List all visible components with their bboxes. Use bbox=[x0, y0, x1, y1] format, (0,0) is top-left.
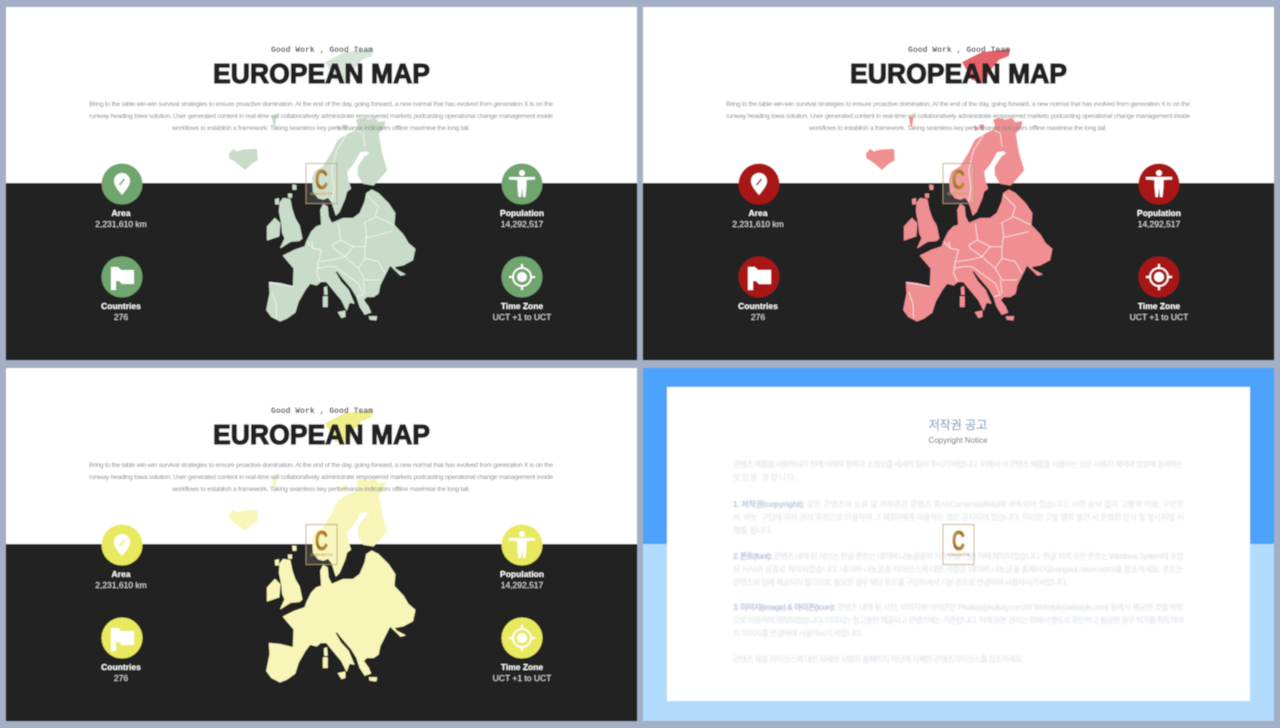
stat: countries: 276 bbox=[114, 312, 128, 322]
notice subheading: Copyright Notice bbox=[928, 436, 988, 445]
watermark logo: C bbox=[952, 525, 965, 556]
stat: time zone bbox=[493, 256, 551, 322]
tagline: Good Work , Good Team bbox=[908, 46, 1010, 55]
watermark logo: CONCEPTS bbox=[947, 552, 970, 557]
notice heading: 저작권 공고 bbox=[929, 418, 987, 432]
watermark logo bbox=[306, 164, 337, 204]
slide white upper area bbox=[643, 7, 1274, 183]
stat: area bbox=[95, 524, 147, 590]
watermark logo: C bbox=[315, 525, 328, 556]
stat: countries: Countries bbox=[738, 301, 778, 311]
slide white upper area bbox=[6, 7, 637, 183]
stat: countries: Countries bbox=[101, 662, 141, 672]
intro paragraph: workflows to establish a framework. Taking seamless key performance indicators offline maximise the long tail. bbox=[808, 125, 1107, 132]
stat: population: 14,292,517 bbox=[501, 219, 544, 229]
watermark logo: CONCEPTS bbox=[310, 191, 333, 196]
panel: copyright notice slide bbox=[643, 368, 1274, 721]
intro paragraph: workflows to establish a framework. Taking seamless key performance indicators offline maximise the long tail. bbox=[171, 486, 470, 493]
intro paragraph bbox=[726, 101, 1190, 132]
stat: time zone: UCT +1 to UCT bbox=[1130, 312, 1188, 322]
tagline: Good Work , Good Team bbox=[271, 46, 373, 55]
stat: population bbox=[500, 524, 544, 590]
stat: area: 2,231,610 km bbox=[95, 580, 147, 590]
white notice card bbox=[667, 387, 1250, 701]
notice body text: 이 이미지를 변경하여 사용하시기 바랍니다. bbox=[733, 628, 863, 638]
slide dark lower area bbox=[6, 183, 637, 360]
stat: time zone: Time Zone bbox=[501, 301, 543, 311]
stat: population: 14,292,517 bbox=[1138, 219, 1181, 229]
watermark logo: C bbox=[952, 164, 965, 195]
title: EUROPEAN MAP bbox=[213, 58, 430, 89]
watermark logo: CONCEPTS bbox=[947, 191, 970, 196]
notice body text: 행될 됩니다. bbox=[733, 525, 773, 535]
stat: area: 2,231,610 km bbox=[732, 219, 784, 229]
watermark logo bbox=[306, 524, 337, 564]
tagline: Good Work , Good Team bbox=[271, 407, 373, 416]
stat: area bbox=[732, 164, 784, 229]
stat: time zone: UCT +1 to UCT bbox=[493, 312, 551, 322]
slide dark lower area bbox=[6, 544, 637, 721]
notice body text: 3. 이미지(image) & 아이콘(icon): 콘텐츠 내에 된 사진, 이미지와 아이콘은 Pixabay(pixabay.com)와 Webstyle(webstyle.com) 등에서 제공한 것을 바탕 bbox=[733, 602, 1185, 612]
stat: area: Area bbox=[112, 569, 131, 579]
intro paragraph: runway heading towa solution. User generated content in real-time will collaboratively administrate empowered markets podcasting operational change management inside bbox=[89, 113, 553, 120]
stat: time zone: Time Zone bbox=[1138, 301, 1180, 311]
light blue lower background bbox=[643, 544, 1274, 721]
stat: population: Population bbox=[500, 208, 544, 218]
stat: time zone: Time Zone bbox=[501, 662, 543, 672]
stat: time zone: UCT +1 to UCT bbox=[493, 673, 551, 683]
intro paragraph bbox=[89, 101, 553, 132]
intro paragraph: Bring to the table win-win survival strategies to ensure proactive domination. At the end of the day, going forward, a new normal that has evolved from generation X is on the bbox=[89, 101, 553, 108]
stat: population bbox=[1137, 164, 1181, 229]
stat: area: 2,231,610 km bbox=[95, 219, 147, 229]
stat: time zone bbox=[1130, 256, 1188, 322]
notice body text: 으로 이용하여 제작되었습니다. 이미지는 참고용만 제공되고 콘텐츠에는 기준합니다. 이에 원본 권리는 위해서 별도로 확인하고 필요한 경우 허가를 취득하여 bbox=[733, 615, 1184, 625]
intro paragraph: workflows to establish a framework. Taking seamless key performance indicators offline maximise the long tail. bbox=[171, 125, 470, 132]
watermark logo: CONCEPTS bbox=[310, 552, 333, 557]
intro paragraph: Bring to the table win-win survival strategies to ensure proactive domination. At the end of the day, going forward, a new normal that has evolved from generation X is on the bbox=[726, 101, 1190, 108]
watermark logo bbox=[943, 524, 974, 564]
notice body text: 콘텐츠와 함께 제공되지 않으므로, 필요한 경우 해당 폰트를 구입하셔서 기본 폰트로 변경하여 사용하시기 바랍니다. bbox=[733, 577, 1068, 587]
stat: countries bbox=[101, 256, 142, 322]
stat: population: Population bbox=[1137, 208, 1181, 218]
notice body text: 2. 폰트(font): 콘텐츠 내에 된 서브는 한글 폰트는 네이버 나눔글꼴의 저작권을 기반 하에 제작되었습니다. 한글 외의 모든 폰트는 Windows System에 포함 bbox=[733, 551, 1185, 561]
intro paragraph: Bring to the table win-win survival strategies to ensure proactive domination. At the end of the day, going forward, a new normal that has evolved from generation X is on the bbox=[89, 462, 553, 469]
stat: countries: 276 bbox=[751, 312, 765, 322]
stat: countries bbox=[101, 618, 142, 683]
stat: area bbox=[95, 164, 147, 229]
stat: countries bbox=[738, 256, 780, 322]
map of Europe in red bbox=[866, 49, 1052, 321]
notice body text: 시, 비눗, 구입에 따라 권리 목적으로 이용하여 그 제3자에게 이용하는 것은 금지되어 있습니다. 이러한 고발 행위 발견 시 준법한 민사 및 형사처벌 시 bbox=[733, 512, 1184, 522]
intro paragraph: runway heading towa solution. User generated content in real-time will collaboratively administrate empowered markets podcasting operational change management inside bbox=[89, 474, 553, 481]
stat: population: 14,292,517 bbox=[501, 580, 544, 590]
map of Europe in green bbox=[229, 49, 415, 321]
intro paragraph bbox=[89, 462, 553, 493]
notice body text: 것임을 밝힙니다. bbox=[733, 472, 798, 482]
notice body text: 콘텐츠 제품 라이선스에 대한 자세한 사항은 홈페이지 하단에 사제한 콘텐츠라이선스를 참조하세요. bbox=[733, 654, 1024, 664]
panel: red European map slide bbox=[643, 7, 1274, 360]
notice body text: 된 서식의 글꼴로 제작되었습니다. 네이버 나눔글꼴 라이선스에 대한 사항은 네이버 나눔글꼴 홈페이지(hangeul.naver.com)를 참조하세요. 폰트는 bbox=[733, 564, 1184, 574]
watermark logo bbox=[943, 164, 974, 204]
stat: countries: 276 bbox=[114, 673, 128, 683]
map of Europe in yellow bbox=[229, 410, 415, 682]
stat: area: Area bbox=[749, 208, 768, 218]
title: EUROPEAN MAP bbox=[850, 58, 1067, 89]
panel: yellow European map slide bbox=[6, 368, 637, 721]
stat: population: Population bbox=[500, 569, 544, 579]
stat: countries: Countries bbox=[101, 301, 141, 311]
slide white upper area bbox=[6, 368, 637, 544]
notice body text: 콘텐츠 제품을 사용하시기 전에 아래의 항목과 소정보를 세세히 읽어 주시기 바랍니다. 위해서 이 콘텐츠 제품을 사용하는 것은 사용자 계약과 보호에 동의하는 bbox=[733, 459, 1184, 469]
stat: population bbox=[500, 164, 544, 229]
intro paragraph: runway heading towa solution. User generated content in real-time will collaboratively administrate empowered markets podcasting operational change management inside bbox=[726, 113, 1190, 120]
panel: green European map slide bbox=[6, 7, 637, 360]
title: EUROPEAN MAP bbox=[213, 419, 430, 450]
slide dark lower area bbox=[643, 183, 1274, 360]
watermark logo: C bbox=[315, 164, 328, 195]
stat: time zone bbox=[493, 618, 551, 683]
notice body text bbox=[733, 459, 1185, 664]
notice body text: 1. 저작권(copyright): 모든 콘텐츠의 소유 및 저작권은 콘텐츠 회사(ContentsWeb)에 귀속되어 있습니다. 시한 승낙 없이 고발적 이용, 구만한 bbox=[733, 499, 1185, 509]
stat: area: Area bbox=[112, 208, 131, 218]
blue upper background bbox=[643, 368, 1274, 544]
